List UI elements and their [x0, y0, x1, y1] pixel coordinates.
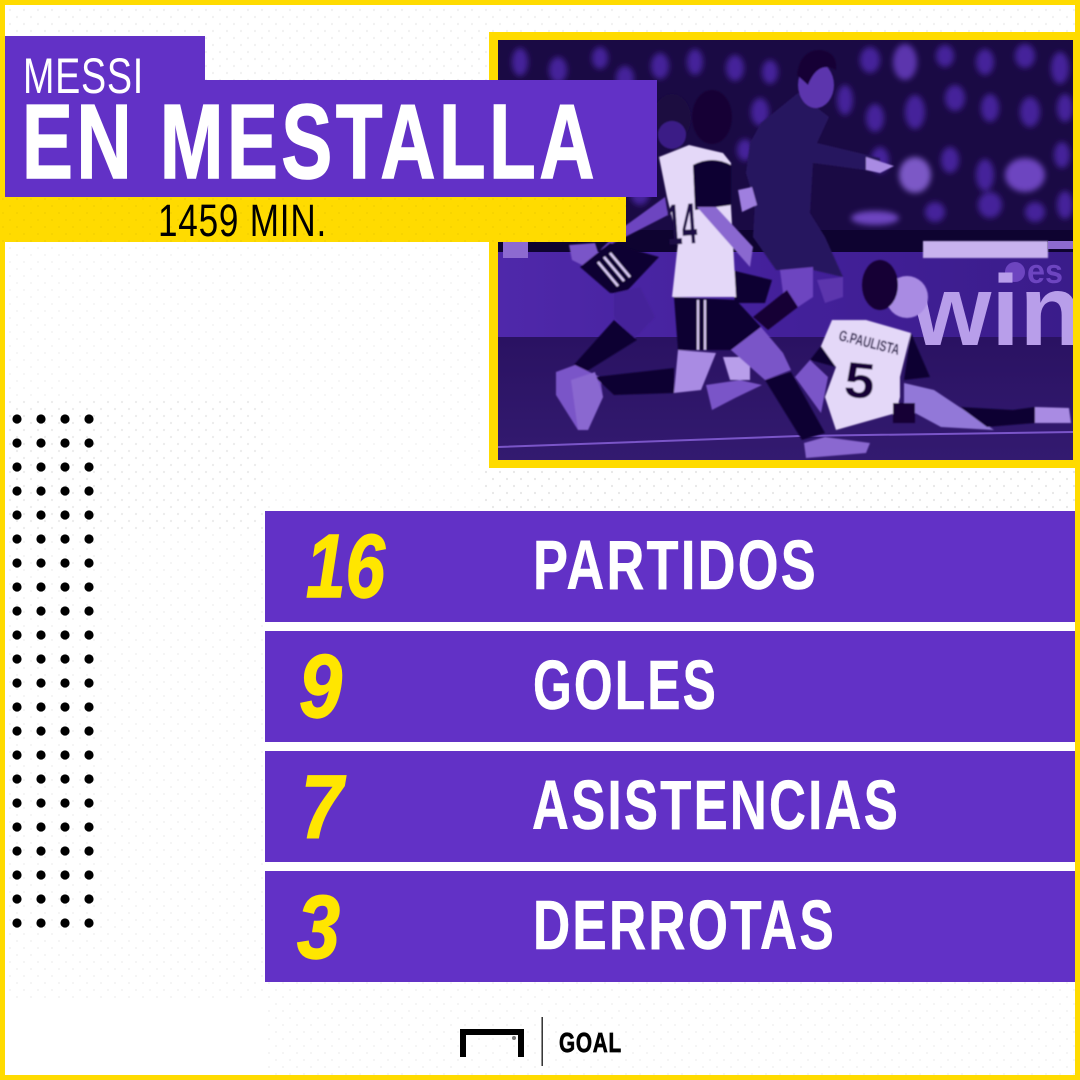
stat row: 9 goles: GOLES: [533, 646, 718, 724]
player: Valencia number 14: [571, 90, 870, 458]
player: Messi: [738, 50, 894, 330]
icon: goal frame: [463, 1032, 521, 1057]
subtitle bar: minutes: 1459 MIN.: [158, 195, 327, 246]
crowd: [512, 44, 1073, 225]
heading: EN MESTALLA: EN MESTALLA: [22, 83, 598, 201]
header: purple title block: [5, 36, 657, 201]
panel: match photo: win: [911, 255, 1080, 367]
advertising boards: [498, 230, 1073, 252]
stat row: 16 partidos: PARTIDOS: [533, 526, 818, 604]
stat row: 16 partidos: 16: [306, 517, 386, 617]
panel: match photo: [489, 32, 1080, 468]
stat row: 7 asistencias: ASISTENCIAS: [532, 766, 900, 844]
stat row: 16 partidos: [265, 511, 1075, 622]
stat row: 3 derrotas: DERROTAS: [533, 886, 836, 964]
logo: Goal: GOAL: [559, 1027, 622, 1058]
logo: Goal: [463, 1017, 622, 1066]
stat row: 3 derrotas: [265, 871, 1075, 982]
heading: MESSI: MESSI: [23, 48, 144, 104]
stat row: 3 derrotas: 3: [297, 878, 340, 978]
pitch: [498, 337, 1073, 460]
player: left Valencia defender: [556, 94, 691, 430]
decorative dot grid: [12, 414, 94, 928]
player: G. Paulista: 5: [842, 351, 878, 410]
stat row: 7 asistencias: 7: [301, 758, 346, 858]
stat row: 7 asistencias: [265, 751, 1075, 862]
subtitle bar: minutes: [0, 195, 626, 246]
stat row: 9 goles: [265, 631, 1075, 742]
player: Valencia number 14: 14: [664, 191, 699, 258]
player: behind right shorts and boot: [706, 270, 772, 410]
panel: match photo: es: [1027, 253, 1063, 291]
player: G. Paulista: [795, 260, 1071, 430]
player: G. Paulista: G.PAULISTA: [837, 327, 901, 359]
stat row: 9 goles: 9: [299, 637, 342, 737]
